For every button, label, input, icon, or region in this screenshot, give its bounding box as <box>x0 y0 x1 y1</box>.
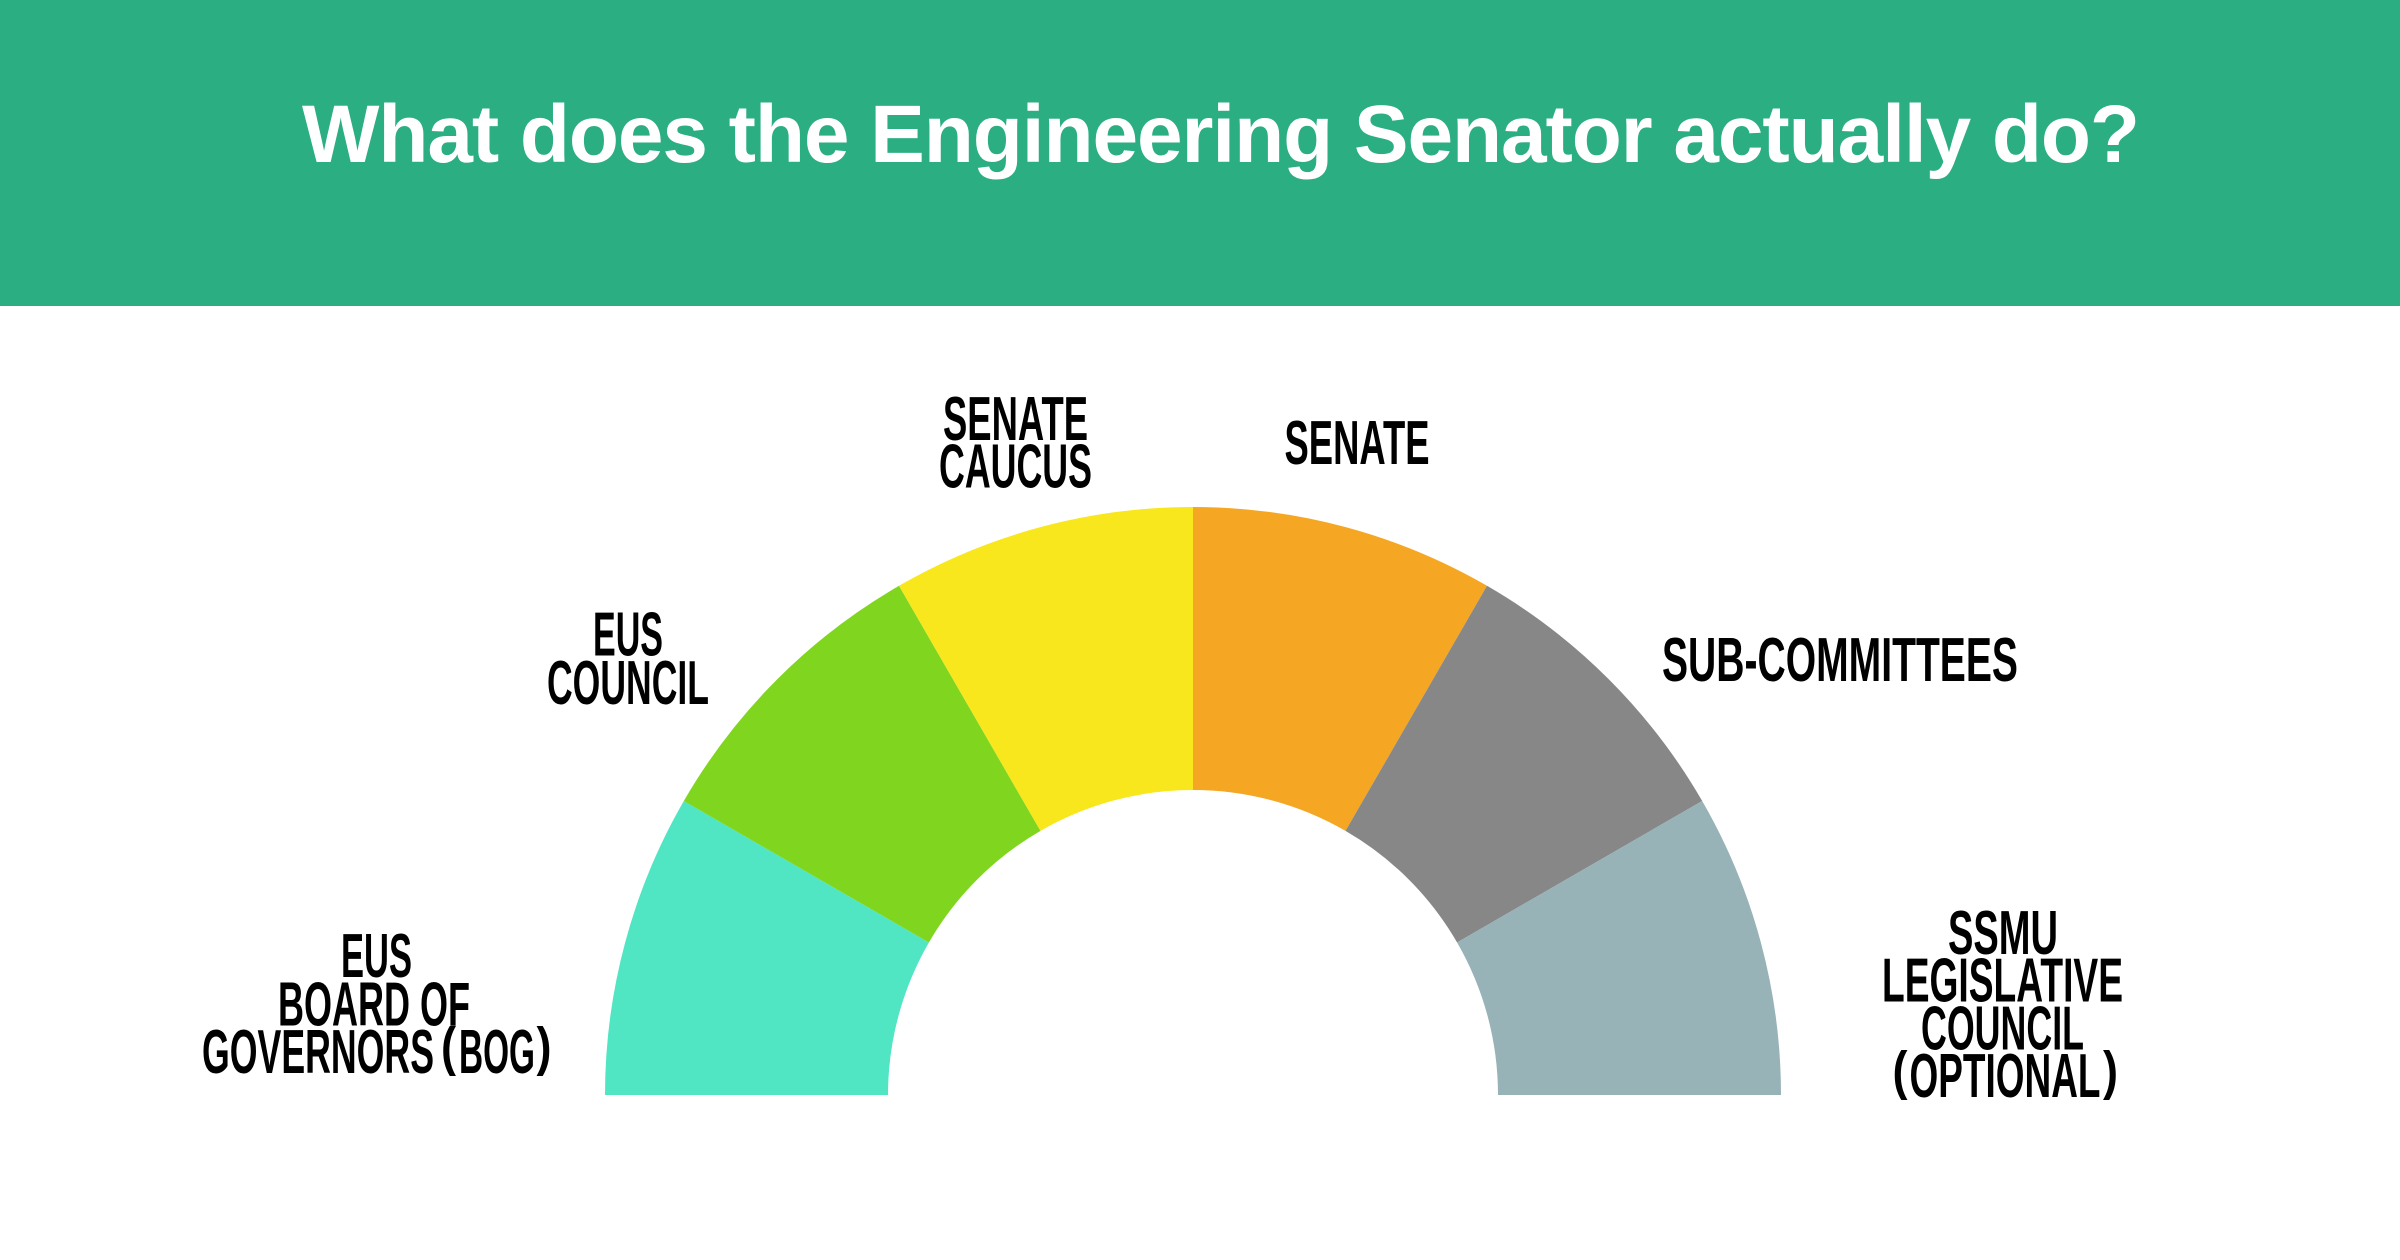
label: EUS board of governors: GOVERNORS <box>202 1017 434 1087</box>
label: EUS council: COUNCIL <box>547 648 709 718</box>
segment: EUS board of governors <box>605 801 929 1095</box>
label: EUS board of governors: ( <box>441 1017 456 1077</box>
semicircular chart <box>605 507 1781 1095</box>
title: What does the Engineering Senator actually do? <box>302 89 2140 180</box>
label: senate caucus: CAUCUS <box>939 432 1092 502</box>
label: EUS board of governors: EUS <box>341 921 412 991</box>
label: SSMU legislative council: ) <box>2103 1041 2118 1101</box>
label: SSMU legislative council <box>1882 898 2123 1111</box>
segment: senate <box>1193 507 1487 831</box>
segment: EUS council <box>684 586 1040 942</box>
header banner <box>0 0 2400 306</box>
label: senate caucus: SENATE <box>943 384 1088 454</box>
segment: SSMU legislative council <box>1457 801 1781 1095</box>
label: senate: SENATE <box>1284 408 1430 478</box>
label: SSMU legislative council: ( <box>1892 1041 1908 1101</box>
label: EUS council: EUS <box>593 600 663 670</box>
label: SSMU legislative council: LEGISLATIVE <box>1882 946 2123 1016</box>
label: EUS board of governors: BOG <box>459 1017 535 1087</box>
label: sub-committees: SUB-COMMITTEES <box>1662 625 2018 695</box>
label: EUS board of governors <box>202 921 552 1087</box>
label: SSMU legislative council: SSMU <box>1948 898 2058 968</box>
label: EUS council <box>547 600 709 718</box>
label: EUS board of governors: BOARD OF <box>278 970 470 1040</box>
label: senate caucus <box>939 384 1092 502</box>
segment: senate caucus <box>899 507 1193 831</box>
label: EUS board of governors: ) <box>536 1017 552 1077</box>
segment: sub-committees <box>1346 586 1702 942</box>
label: SSMU legislative council: OPTIONAL <box>1910 1041 2100 1111</box>
label: SSMU legislative council: COUNCIL <box>1921 994 2084 1064</box>
